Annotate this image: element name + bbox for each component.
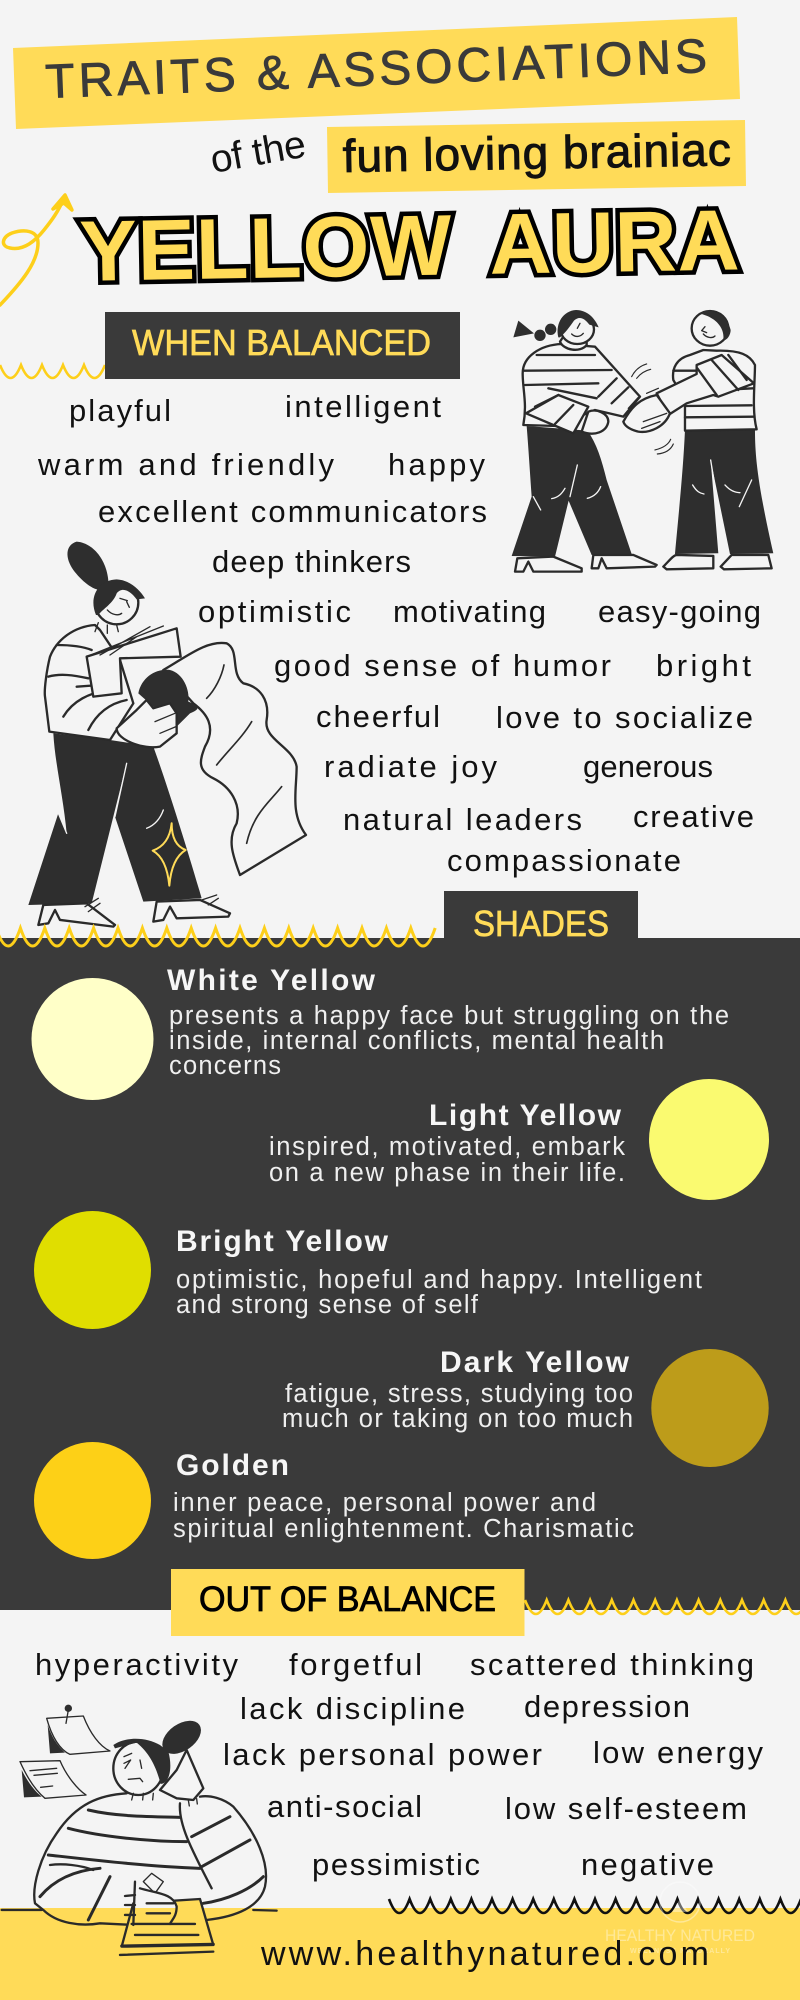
trait: hyperactivity: hyperactivity <box>35 1647 238 1682</box>
description: light yellow: on a new phase in their life. <box>269 1159 625 1187</box>
trousers <box>28 733 202 905</box>
head <box>95 581 138 624</box>
man's sweater <box>673 350 757 431</box>
woman's neck and head <box>560 337 587 350</box>
woman's smile <box>572 323 583 336</box>
collar <box>95 623 118 633</box>
illustration: thinking person at desk <box>2 1705 277 1955</box>
icon: yellow sparkle <box>153 823 186 886</box>
trait: happy: happy <box>388 447 486 482</box>
trait: lack discipline: lack discipline <box>240 1691 465 1726</box>
writing hand above desk <box>133 1890 177 1908</box>
description: golden <box>173 1489 634 1543</box>
ponytail <box>67 542 108 590</box>
subtitle: of the: of the <box>207 123 309 182</box>
trait: excellent communicators: excellent communicators <box>98 494 487 529</box>
title band: traits and associations <box>13 17 740 129</box>
trait: depression: depression <box>524 1689 690 1724</box>
description: dark yellow: fatigue, stress, studying too <box>285 1380 633 1408</box>
title band: traits and associations: TRAITS & ASSOCIATIONS <box>44 30 708 109</box>
trouser highlights <box>58 763 163 833</box>
trait: cheerful: cheerful <box>316 699 440 734</box>
watermark: healthy natured: HEALTHY NATURED <box>605 1926 755 1945</box>
motion marks <box>632 364 673 454</box>
paper on desk <box>122 1899 213 1947</box>
footer url: www.healthynatured.com <box>260 1935 709 1973</box>
swatch: light yellow <box>649 1079 769 1200</box>
shade: white yellow <box>32 964 729 1100</box>
trait: forgetful: forgetful <box>289 1647 422 1682</box>
shade: golden <box>34 1442 634 1559</box>
trouser highlights <box>533 460 752 510</box>
description: golden: inner peace, personal power and <box>173 1489 596 1517</box>
trait: generous: generous <box>583 749 713 784</box>
subtitle band: fun loving brainiac: fun loving brainiac <box>342 123 731 182</box>
sweater stripes <box>48 645 127 730</box>
description: white yellow: inside, internal conflicts, mental health <box>169 1027 664 1055</box>
desk shadow line <box>2 1906 277 1914</box>
woman's hand <box>582 411 608 434</box>
heading: when balanced <box>105 312 460 379</box>
swatch: white yellow <box>32 978 154 1100</box>
trait: optimistic: optimistic <box>198 594 351 629</box>
face <box>107 598 129 615</box>
man's shoes <box>663 555 772 569</box>
shoes <box>38 900 230 927</box>
trait: anti-social: anti-social <box>267 1789 422 1824</box>
trait: warm and friendly: warm and friendly <box>37 447 334 482</box>
footer band <box>0 1908 800 2000</box>
heading: light yellow: Light Yellow <box>429 1099 622 1132</box>
main title: yellow aura <box>79 192 740 300</box>
main title: yellow aura: AURA <box>489 192 740 293</box>
heading: bright yellow: Bright Yellow <box>176 1225 389 1258</box>
arm raised to head <box>160 1750 203 1800</box>
book <box>87 628 181 697</box>
trait: scattered thinking: scattered thinking <box>470 1647 754 1682</box>
main title: yellow aura: YELLOW <box>79 197 453 300</box>
heading: dark yellow: Dark Yellow <box>440 1346 630 1379</box>
trait: intelligent: intelligent <box>285 389 441 424</box>
man's hair <box>700 311 731 341</box>
paper creases <box>207 665 282 843</box>
man's smile <box>702 327 715 338</box>
panel: shades background <box>0 938 800 1610</box>
illustration: two people shaking hands <box>512 310 773 572</box>
trait: low energy: low energy <box>593 1735 764 1770</box>
hair <box>113 1739 170 1784</box>
trait: love to socialize: love to socialize <box>496 700 753 735</box>
heading: shades: SHADES <box>473 903 609 944</box>
finger lines <box>628 388 667 428</box>
writing lines <box>120 1924 213 1955</box>
trait: bright: bright <box>656 648 751 683</box>
woman's sweater <box>523 344 640 426</box>
clasped hands <box>623 395 670 432</box>
sweater stripes <box>40 1810 263 1920</box>
woman's shoes <box>515 555 657 572</box>
man's trousers <box>675 428 773 554</box>
woman's crossing arm <box>526 395 588 433</box>
woman's hair bow <box>513 321 556 341</box>
second note <box>20 1761 86 1798</box>
shade: bright yellow <box>34 1211 702 1329</box>
description: golden: spiritual enlightenment. Charismatic <box>173 1515 634 1543</box>
description: white yellow <box>169 1002 729 1080</box>
sweater fill above desk <box>34 1793 266 1908</box>
trait: lack personal power: lack personal power <box>223 1737 542 1772</box>
wave: right of out of balance <box>525 1600 800 1614</box>
fingers <box>155 713 176 733</box>
trait: deep thinkers: deep thinkers <box>212 544 411 579</box>
man's sweater stripes <box>673 371 753 417</box>
illustration: woman with book and paper <box>28 542 306 927</box>
flowing paper <box>163 643 306 875</box>
note pinned to wall <box>47 1705 110 1754</box>
pencil <box>143 1873 163 1893</box>
description: light yellow: inspired, motivated, embark <box>269 1133 625 1161</box>
description: white yellow: concerns <box>169 1052 281 1080</box>
swatch: bright yellow <box>34 1211 151 1329</box>
hair bun <box>156 1714 207 1761</box>
woman's sweater stripes <box>524 355 628 403</box>
shoelaces <box>85 895 218 912</box>
watermark: healthy natured: WELLNESS NATURALLY <box>630 1948 730 1955</box>
man's arm stripes <box>697 355 747 395</box>
description: bright yellow: and strong sense of self <box>176 1291 479 1319</box>
trait: negative: negative <box>581 1847 714 1882</box>
icon: looping yellow arrow <box>0 195 72 305</box>
collar ticks <box>132 1793 197 1806</box>
heading: white yellow: White Yellow <box>167 964 376 997</box>
inner arm line <box>50 1803 212 1888</box>
heading: out of balance <box>171 1569 524 1636</box>
dark shape behind hand <box>138 670 198 727</box>
trait: creative: creative <box>633 799 754 834</box>
description: white yellow: presents a happy face but struggling on the <box>169 1002 729 1030</box>
shade: light yellow <box>269 1079 769 1200</box>
trait: natural leaders: natural leaders <box>343 802 582 837</box>
description: bright yellow <box>176 1266 702 1319</box>
heading: out of balance: OUT OF BALANCE <box>199 1580 496 1619</box>
sweater outline <box>34 1793 266 1925</box>
trait: easy-going: easy-going <box>598 594 761 629</box>
heading: shades <box>444 891 638 944</box>
description: light yellow <box>269 1133 625 1187</box>
woman's hair <box>558 310 599 337</box>
trait: radiate joy: radiate joy <box>324 749 498 784</box>
writing hand outline <box>125 1882 177 1925</box>
wave: black squiggle above footer <box>389 1899 800 1913</box>
head <box>113 1742 163 1795</box>
list: balanced traits <box>37 389 761 878</box>
book pages <box>88 626 163 656</box>
trait: pessimistic: pessimistic <box>312 1847 480 1882</box>
watermark: healthy natured <box>605 1882 755 1955</box>
wave: above shades panel <box>0 928 435 946</box>
list: out of balance traits <box>35 1647 764 1882</box>
trait: compassionate: compassionate <box>447 843 681 878</box>
heading: when balanced: WHEN BALANCED <box>132 322 431 363</box>
trait: playful: playful <box>69 393 171 428</box>
description: dark yellow <box>282 1380 633 1433</box>
description: bright yellow: optimistic, hopeful and happy. Intelligent <box>176 1266 702 1294</box>
trait: good sense of humor: good sense of humor <box>274 648 611 683</box>
description: dark yellow: much or taking on too much <box>282 1405 633 1433</box>
trait: motivating: motivating <box>393 594 546 629</box>
hair <box>93 579 145 615</box>
wave: top left squiggle <box>0 365 105 378</box>
swatch: golden <box>34 1442 151 1559</box>
shade: dark yellow <box>282 1346 769 1467</box>
man's head <box>692 311 728 346</box>
swatch: dark yellow <box>651 1349 769 1467</box>
sweater <box>45 625 133 740</box>
man's arm <box>657 355 754 415</box>
woman's arm stripes <box>535 395 573 424</box>
trait: low self-esteem: low self-esteem <box>505 1791 747 1826</box>
heading: golden: Golden <box>176 1449 289 1482</box>
hand <box>117 700 177 747</box>
face <box>124 1753 143 1782</box>
woman's trousers <box>512 426 632 557</box>
